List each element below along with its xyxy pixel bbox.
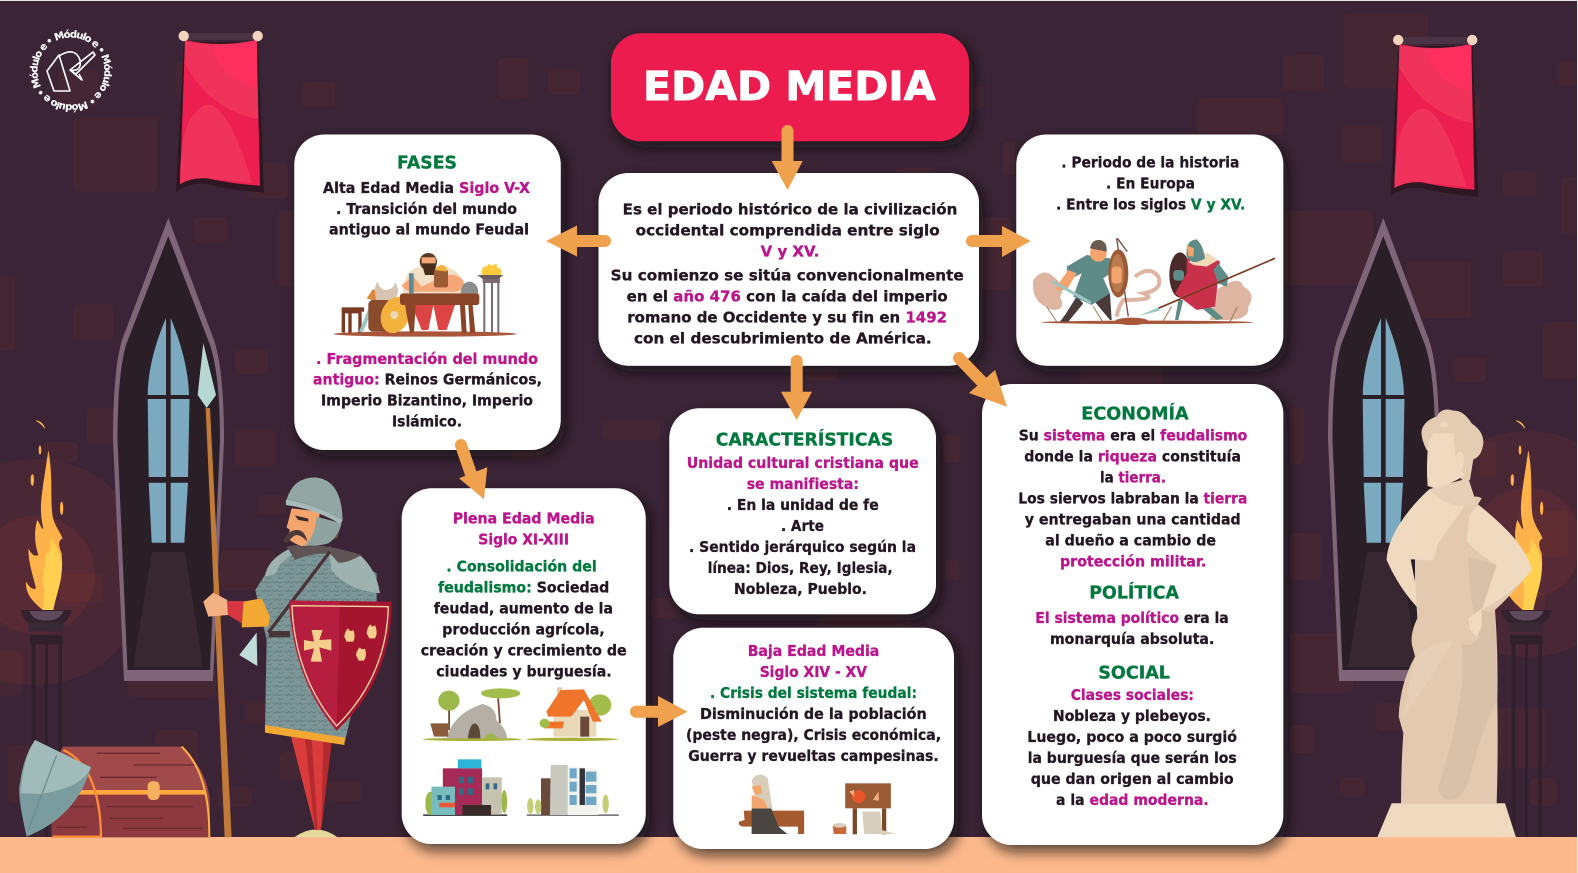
spear shaft bbox=[206, 408, 232, 837]
alta edad media text: Alta Edad Media Siglo V-X bbox=[323, 180, 531, 197]
panel: características bbox=[669, 408, 936, 614]
key points: . En Europa bbox=[1106, 176, 1195, 193]
heading: Siglo XIV - XV bbox=[760, 664, 868, 681]
body text: . Crisis del sistema feudal: bbox=[710, 685, 917, 702]
logo icon bbox=[47, 52, 95, 91]
economy text: Su sistema era el feudalismo bbox=[1019, 428, 1247, 445]
definition text: con el descubrimiento de América. bbox=[634, 331, 932, 348]
panel: baja edad media bbox=[673, 628, 954, 849]
heading: CARACTERÍSTICAS bbox=[716, 428, 893, 450]
left banner bbox=[176, 31, 264, 193]
left torch bbox=[21, 421, 72, 837]
definition text: romano de Occidente y su fin en 1492 bbox=[627, 310, 947, 327]
politics text bbox=[1035, 610, 1229, 648]
arrow: fases to plena bbox=[459, 445, 487, 499]
arrow: title to definition bbox=[772, 131, 803, 190]
neck bbox=[1429, 478, 1477, 506]
torch glow left bbox=[0, 459, 149, 685]
body text: ciudades y burguesía. bbox=[436, 664, 612, 681]
social text: la burguesía que serán los bbox=[1028, 750, 1237, 767]
helmet bbox=[287, 477, 343, 520]
illustration: feasting warrior bbox=[333, 253, 517, 337]
social text bbox=[1027, 687, 1237, 809]
panel background bbox=[982, 384, 1283, 845]
key points bbox=[1056, 155, 1245, 214]
body text: Guerra y revueltas campesinas. bbox=[688, 748, 939, 765]
economy text: la tierra. bbox=[1100, 470, 1166, 487]
cave bbox=[423, 688, 521, 741]
medieval house bbox=[526, 687, 618, 741]
sleeve and hand bbox=[242, 598, 270, 627]
definition text: Es el periodo histórico de la civilización bbox=[623, 202, 957, 219]
definition text: V y XV. bbox=[761, 244, 819, 261]
panel: economía, política, social bbox=[982, 384, 1283, 845]
title text: EDAD MEDIA bbox=[643, 64, 936, 110]
definition text: occidental comprendida entre siglo bbox=[636, 223, 940, 240]
arrow: definition to fases bbox=[546, 226, 605, 256]
floor bbox=[0, 837, 1578, 873]
hair bbox=[1422, 410, 1483, 481]
panel background bbox=[669, 408, 936, 614]
characteristics text: . Sentido jerárquico según la bbox=[689, 539, 916, 556]
cheek guard bbox=[305, 517, 342, 546]
torch glow right bbox=[1414, 431, 1578, 657]
left gothic window bbox=[113, 218, 224, 681]
city building bbox=[423, 759, 507, 816]
panel background bbox=[402, 488, 646, 844]
heading: Baja Edad Media bbox=[748, 643, 879, 660]
social text: Nobleza y plebeyos. bbox=[1053, 708, 1211, 725]
characteristics text: . En la unidad de fe bbox=[727, 497, 879, 514]
economy text: protección militar. bbox=[1060, 554, 1206, 571]
panel: plena edad media bbox=[402, 488, 646, 844]
arrow: definition to economía bbox=[959, 358, 1007, 407]
right arm bbox=[1467, 505, 1532, 610]
characteristics text: Nobleza, Pueblo. bbox=[734, 581, 867, 598]
social text: a la edad moderna. bbox=[1056, 792, 1209, 809]
heading: Plena Edad Media bbox=[453, 511, 595, 528]
fragmentation text: Imperio Bizantino, Imperio bbox=[321, 393, 533, 410]
hem bbox=[265, 725, 345, 745]
pillory bbox=[833, 783, 896, 834]
fragmentation text: . Fragmentación del mundo bbox=[316, 351, 538, 368]
panel background bbox=[294, 134, 561, 450]
characteristics text bbox=[687, 455, 919, 598]
right torch bbox=[1501, 421, 1552, 837]
shield bbox=[289, 601, 392, 731]
alta edad media text: antiguo al mundo Feudal bbox=[329, 222, 529, 239]
fragmentation text: Islámico. bbox=[392, 414, 462, 431]
politics text: monarquía absoluta. bbox=[1050, 631, 1214, 648]
body text bbox=[421, 559, 627, 681]
social text: Clases sociales: bbox=[1071, 687, 1194, 704]
soldier with spear bbox=[198, 343, 392, 837]
body text: . Consolidación del bbox=[446, 559, 597, 576]
modern building bbox=[527, 765, 619, 816]
axe blade bbox=[239, 633, 257, 666]
panel background bbox=[673, 628, 954, 849]
definition text: Su comienzo se sitúa convencionalmente bbox=[611, 268, 964, 285]
definition text bbox=[611, 202, 964, 348]
economy text: y entregaban una cantidad bbox=[1025, 512, 1241, 529]
panel background bbox=[598, 173, 979, 366]
economy text bbox=[1018, 428, 1247, 571]
shoulder plates bbox=[265, 548, 380, 593]
heading: Siglo XI-XIII bbox=[478, 532, 569, 549]
fragmentation text bbox=[313, 351, 542, 431]
treasure chest bbox=[52, 747, 210, 837]
economy text: Los siervos labraban la tierra bbox=[1018, 491, 1247, 508]
heading bbox=[748, 643, 879, 681]
key points: . Entre los siglos V y XV. bbox=[1056, 197, 1245, 214]
moustache bbox=[283, 530, 307, 543]
belt bbox=[257, 630, 290, 638]
social text: que dan origen al cambio bbox=[1031, 771, 1234, 788]
strap bbox=[268, 552, 330, 633]
heading: social: SOCIAL bbox=[1098, 663, 1170, 684]
panel background bbox=[1016, 134, 1283, 366]
logo: Módulo e bbox=[29, 30, 112, 112]
praying woman on bench bbox=[739, 775, 804, 834]
title background bbox=[611, 33, 969, 141]
body text: Disminución de la población bbox=[700, 706, 927, 723]
back hair bbox=[330, 523, 341, 540]
alta edad media text: . Transición del mundo bbox=[336, 201, 517, 218]
fragmentation text: antiguo: Reinos Germánicos, bbox=[313, 372, 542, 389]
key points: . Periodo de la historia bbox=[1061, 155, 1239, 172]
panel: periodo bbox=[1016, 134, 1283, 366]
face bbox=[287, 508, 320, 546]
shield piece bbox=[19, 740, 91, 837]
body text: creación y crecimiento de bbox=[421, 643, 627, 660]
gap behind arm bbox=[1411, 559, 1415, 582]
illustrations: plague and pillory bbox=[739, 775, 896, 834]
heading bbox=[453, 511, 595, 549]
heading: política: POLÍTICA bbox=[1089, 582, 1179, 604]
arrow: definition to periodo bbox=[972, 226, 1031, 257]
heading: FASES bbox=[397, 152, 457, 173]
chest bands bbox=[52, 790, 205, 795]
left shoulder and arm bbox=[1387, 489, 1473, 607]
brow bbox=[295, 515, 308, 522]
body text: (peste negra), Crisis económica, bbox=[686, 727, 941, 744]
sash bbox=[1433, 496, 1482, 587]
body text: producción agrícola, bbox=[442, 622, 605, 639]
arrow: plena to baja bbox=[636, 696, 688, 727]
chainmail tunic bbox=[255, 547, 377, 742]
right gothic window bbox=[1328, 218, 1439, 681]
characteristics text: línea: Dios, Rey, Iglesia, bbox=[708, 560, 893, 577]
panel: definition bbox=[598, 173, 979, 366]
drape shadow bbox=[1468, 557, 1497, 638]
shield flames bbox=[344, 624, 377, 661]
body text bbox=[686, 685, 941, 765]
characteristics text: Unidad cultural cristiana que bbox=[687, 455, 919, 472]
robe bbox=[1387, 489, 1532, 804]
heading: economía: ECONOMÍA bbox=[1081, 403, 1189, 425]
arrow: definition to características bbox=[781, 361, 812, 420]
face bbox=[1427, 433, 1465, 488]
characteristics text: se manifiesta: bbox=[747, 476, 859, 493]
shield cross bbox=[304, 630, 331, 662]
small shield and chest bbox=[19, 740, 210, 837]
illustration: warriors fighting bbox=[1033, 238, 1275, 325]
definition text: en el año 476 con la caída del imperio bbox=[627, 289, 948, 306]
panel: fases bbox=[294, 134, 561, 450]
right banner bbox=[1390, 35, 1478, 197]
economy text: donde la riqueza constituía bbox=[1024, 449, 1241, 466]
hand bbox=[1468, 608, 1482, 637]
politics text: El sistema político era la bbox=[1035, 610, 1229, 627]
economy text: al dueño a cambio de bbox=[1045, 533, 1216, 550]
body text: feudalismo: Sociedad bbox=[438, 580, 609, 597]
collar bbox=[287, 545, 362, 563]
marble statue bbox=[1377, 410, 1532, 837]
alta edad media text bbox=[323, 180, 531, 239]
social text: Luego, poco a poco surgió bbox=[1027, 729, 1237, 746]
characteristics text: . Arte bbox=[781, 518, 824, 535]
legs bbox=[291, 737, 332, 830]
sand at feet bbox=[294, 829, 338, 837]
lock bbox=[148, 781, 160, 800]
pedestal bbox=[1377, 803, 1516, 837]
spear head bbox=[198, 343, 216, 408]
logo ring text: Módulo e • Módulo e • Módulo e • Módulo e • bbox=[29, 30, 112, 112]
title box bbox=[611, 33, 969, 141]
wood grain bbox=[57, 753, 203, 828]
body text: feudad, aumento de la bbox=[434, 601, 613, 618]
illustrations: settlements bbox=[423, 687, 619, 816]
